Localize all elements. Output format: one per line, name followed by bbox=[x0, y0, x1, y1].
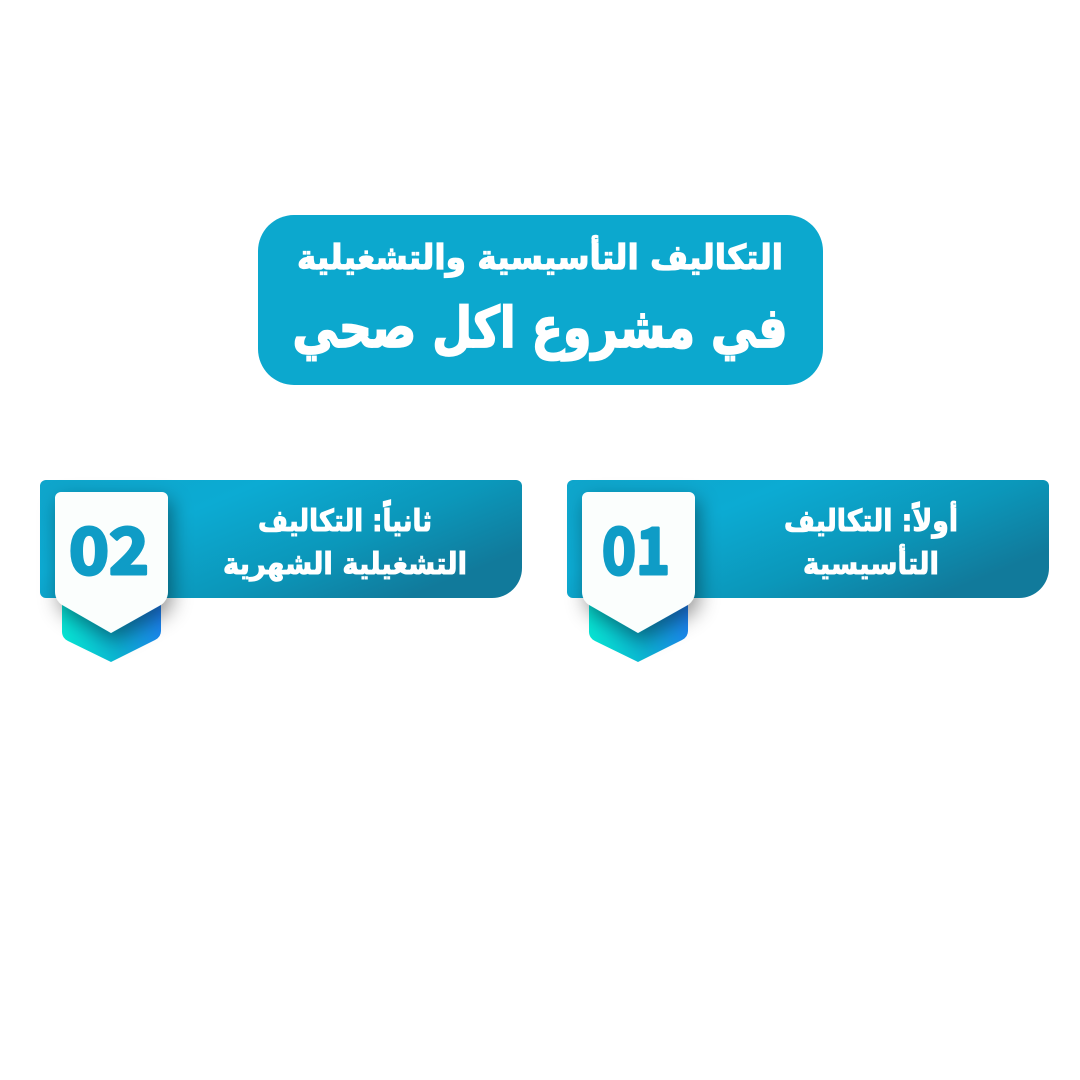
badge 02 bbox=[55, 492, 168, 633]
section bar 02 bbox=[40, 480, 522, 598]
title line 2: في مشروع اكل صحي bbox=[292, 296, 788, 361]
title line 1: التكاليف التأسيسية والتشغيلية bbox=[297, 235, 783, 278]
panel: first section, founding costs bbox=[567, 480, 1049, 662]
section heading 02: ثانياً: التكاليف bbox=[258, 499, 432, 539]
title banner bbox=[258, 215, 823, 385]
section bar 01 bbox=[567, 480, 1049, 598]
section heading 01: أولاً: التكاليف bbox=[784, 501, 958, 539]
badge 01: 01 bbox=[602, 501, 670, 593]
section heading 01: التأسيسية bbox=[803, 544, 939, 582]
badge ribbon tail 02 bbox=[62, 600, 161, 662]
section heading 02: التشغيلية الشهرية bbox=[223, 547, 467, 582]
badge ribbon tail 01 bbox=[589, 600, 688, 662]
badge 01 bbox=[582, 492, 695, 633]
badge 02: 02 bbox=[69, 501, 149, 593]
section heading 02 bbox=[223, 499, 467, 582]
section heading 01 bbox=[784, 501, 958, 582]
panel: second section, monthly operating costs bbox=[40, 480, 522, 662]
title background panel bbox=[258, 215, 823, 385]
